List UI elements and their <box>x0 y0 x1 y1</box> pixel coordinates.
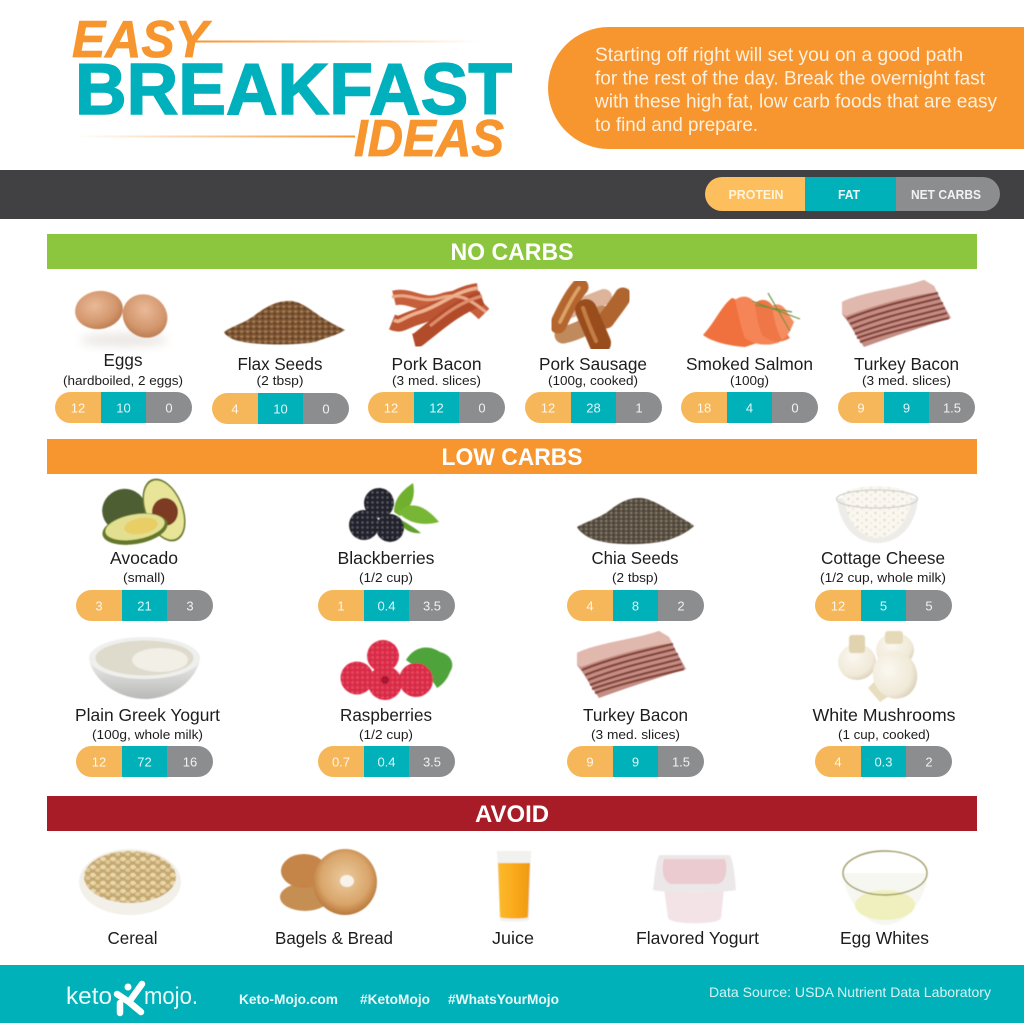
legend band: PROTEIN <box>728 188 784 202</box>
logo: keto-mojo: mojo. <box>144 983 198 1010</box>
food: pork sausage: (100g, cooked) <box>548 373 638 388</box>
nutrient pill: raspberries <box>318 746 455 777</box>
nutrient pill: turkey bacon: 9 <box>903 400 910 416</box>
nutrient pill: turkey bacon: 1.5 <box>943 400 961 416</box>
nutrient pill: plain greek yogurt: 16 <box>183 754 197 770</box>
nutrient pill: pork sausage: 28 <box>586 400 601 416</box>
logo: keto-mojo: keto <box>66 983 112 1010</box>
nutrient pill: plain greek yogurt <box>76 746 213 777</box>
food: pork bacon: Pork Bacon <box>392 354 482 374</box>
nutrient pill: raspberries: 0.4 <box>377 754 396 770</box>
food: egg whites <box>840 851 929 948</box>
food: avocado: Avocado <box>110 548 178 568</box>
title: Easy Breakfast Ideas: BREAKFAST <box>75 50 512 130</box>
nutrient pill: chia seeds <box>567 590 704 621</box>
food: egg whites: Egg Whites <box>840 928 929 948</box>
food: juice: Juice <box>492 928 534 948</box>
food: avocado: (small) <box>123 570 165 585</box>
food: white mushrooms: (1 cup, cooked) <box>838 727 930 742</box>
nutrient pill: flax seeds <box>212 393 349 424</box>
nutrient pill: blackberries <box>318 590 455 621</box>
nutrient pill: avocado: 3 <box>186 598 194 614</box>
food: chia seeds: Chia Seeds <box>592 548 679 568</box>
heading: low carbs: LOW CARBS <box>442 444 582 471</box>
nutrient pill: eggs: 0 <box>165 400 173 416</box>
food: blackberries <box>338 483 439 585</box>
nutrient pill: avocado: 3 <box>95 598 103 614</box>
nutrient pill: pork bacon: 12 <box>429 400 444 416</box>
food: pork sausage: Pork Sausage <box>539 354 647 374</box>
nutrient pill: smoked salmon <box>681 392 818 423</box>
nutrient pill: eggs: 12 <box>71 400 85 416</box>
nutrient pill: smoked salmon: 4 <box>746 400 753 416</box>
nutrient pill: plain greek yogurt: 12 <box>92 754 106 770</box>
food: cereal: Cereal <box>108 928 158 948</box>
nutrient pill: blackberries: 1 <box>337 598 345 614</box>
nutrient pill: plain greek yogurt: 72 <box>137 754 152 770</box>
food: plain greek yogurt: (100g, whole milk) <box>92 727 203 742</box>
food: plain greek yogurt <box>75 637 220 742</box>
nutrient pill: pork sausage: 1 <box>635 400 643 416</box>
food: eggs: (hardboiled, 2 eggs) <box>63 373 183 388</box>
intro callout: to find and prepare. <box>595 115 758 136</box>
nutrient pill: flax seeds: 0 <box>322 402 330 416</box>
food: chia seeds: (2 tbsp) <box>612 570 658 585</box>
nutrient pill: raspberries: 0.7 <box>332 754 350 770</box>
heading: low carbs <box>47 439 977 474</box>
heading: avoid <box>47 796 977 831</box>
food: bagels and bread: Bagels & Bread <box>275 928 393 948</box>
nutrient pill: eggs <box>55 392 192 423</box>
food: flax seeds: (2 tbsp) <box>256 373 304 388</box>
food: chia seeds <box>577 498 694 585</box>
nutrient pill: pork bacon <box>368 392 505 423</box>
nutrient pill: chia seeds: 4 <box>586 598 594 614</box>
nutrient pill: cottage cheese: 5 <box>925 598 933 614</box>
heading: avoid: AVOID <box>475 801 549 828</box>
title: Easy Breakfast Ideas: EASY <box>72 11 212 69</box>
nutrient pill: smoked salmon: 18 <box>697 400 711 416</box>
logo: keto-mojo <box>66 983 198 1013</box>
nutrient pill: turkey bacon (low carb) <box>567 746 704 777</box>
footer band: Keto-Mojo.com <box>239 992 338 1007</box>
food: pork bacon <box>392 288 486 388</box>
nutrient pill: turkey bacon (low carb): 9 <box>632 754 639 770</box>
food: bagels and bread <box>275 849 393 948</box>
food: turkey bacon: Turkey Bacon <box>854 354 959 374</box>
nutrient pill: white mushrooms <box>815 746 952 777</box>
nutrient pill: raspberries: 3.5 <box>423 754 441 770</box>
footer band <box>0 965 1024 1023</box>
food: eggs: Eggs <box>104 350 143 370</box>
nutrient pill: flax seeds: 4 <box>231 402 239 416</box>
nutrient pill: chia seeds: 2 <box>677 598 685 614</box>
nutrient pill: pork bacon: 0 <box>478 400 486 416</box>
footer band: Data Source: USDA Nutrient Data Laboratory <box>709 984 991 1000</box>
food: flavored yogurt <box>636 855 759 948</box>
food: cottage cheese: (1/2 cup, whole milk) <box>820 570 946 585</box>
food: flax seeds <box>224 301 345 388</box>
nutrient pill: blackberries: 3.5 <box>423 598 441 614</box>
food: pork bacon: (3 med. slices) <box>392 373 481 388</box>
food: white mushrooms: White Mushrooms <box>812 705 956 725</box>
food: eggs <box>63 286 183 388</box>
nutrient pill: cottage cheese: 12 <box>831 598 845 614</box>
nutrient pill: avocado: 21 <box>137 598 152 614</box>
food: turkey bacon (low carb): Turkey Bacon <box>583 705 688 725</box>
food: flavored yogurt: Flavored Yogurt <box>636 928 759 948</box>
food: white mushrooms <box>812 631 956 742</box>
food: smoked salmon: Smoked Salmon <box>686 354 813 374</box>
nutrient pill: white mushrooms: 0.3 <box>874 754 893 770</box>
food: smoked salmon <box>686 293 813 388</box>
footer band: #WhatsYourMojo <box>448 992 559 1007</box>
nutrient pill: pork sausage <box>525 392 662 423</box>
heading: no carbs <box>47 234 977 269</box>
nutrient pill: avocado <box>76 590 213 621</box>
nutrient pill: cottage cheese <box>815 590 952 621</box>
footer band: #KetoMojo <box>360 992 430 1007</box>
food: pork sausage <box>539 287 647 388</box>
nutrient pill: turkey bacon (low carb): 1.5 <box>672 754 690 770</box>
food: cottage cheese: Cottage Cheese <box>821 548 945 568</box>
intro callout <box>548 27 1024 149</box>
nutrient pill: white mushrooms: 2 <box>925 754 933 770</box>
food: cottage cheese <box>820 486 946 585</box>
food: turkey bacon (low carb): (3 med. slices) <box>591 727 680 742</box>
nutrient pill: cottage cheese: 5 <box>880 598 887 614</box>
food: raspberries <box>340 640 452 742</box>
food: juice <box>492 851 534 948</box>
food: turkey bacon: (3 med. slices) <box>862 373 951 388</box>
food: smoked salmon: (100g) <box>730 373 769 388</box>
nutrient pill: flax seeds: 10 <box>273 402 288 416</box>
food: blackberries: (1/2 cup) <box>359 570 413 585</box>
legend band: NET CARBS <box>911 188 981 202</box>
nutrient pill: chia seeds: 8 <box>632 598 639 614</box>
intro callout: for the rest of the day. Break the overnight fast <box>595 68 986 90</box>
intro callout: with these high fat, low carb foods that are easy <box>594 92 997 112</box>
nutrient pill: pork sausage: 12 <box>541 400 555 416</box>
nutrient pill: turkey bacon: 9 <box>857 400 865 416</box>
nutrient pill: pork bacon: 12 <box>384 400 398 416</box>
nutrient pill: turkey bacon (low carb): 9 <box>586 754 594 770</box>
food: blackberries: Blackberries <box>338 548 435 568</box>
food: turkey bacon (low carb) <box>577 631 688 742</box>
food: cereal <box>79 849 181 948</box>
nutrient pill: smoked salmon: 0 <box>791 400 799 416</box>
intro callout: Starting off right will set you on a good path <box>595 45 963 66</box>
nutrient pill: blackberries: 0.4 <box>377 598 396 614</box>
food: raspberries: Raspberries <box>340 705 432 725</box>
nutrient pill: white mushrooms: 4 <box>834 754 842 770</box>
nutrient pill: turkey bacon <box>838 392 975 423</box>
food: turkey bacon <box>842 280 959 388</box>
food: avocado <box>95 472 194 585</box>
title: Easy Breakfast Ideas: IDEAS <box>354 110 504 168</box>
heading: no carbs: NO CARBS <box>450 239 574 266</box>
title: Easy Breakfast Ideas <box>72 11 512 168</box>
food: flax seeds: Flax Seeds <box>238 354 323 374</box>
food: raspberries: (1/2 cup) <box>359 727 413 742</box>
legend band: FAT <box>838 188 860 202</box>
food: plain greek yogurt: Plain Greek Yogurt <box>75 705 220 725</box>
legend band <box>0 170 1024 219</box>
nutrient pill: eggs: 10 <box>116 400 131 416</box>
